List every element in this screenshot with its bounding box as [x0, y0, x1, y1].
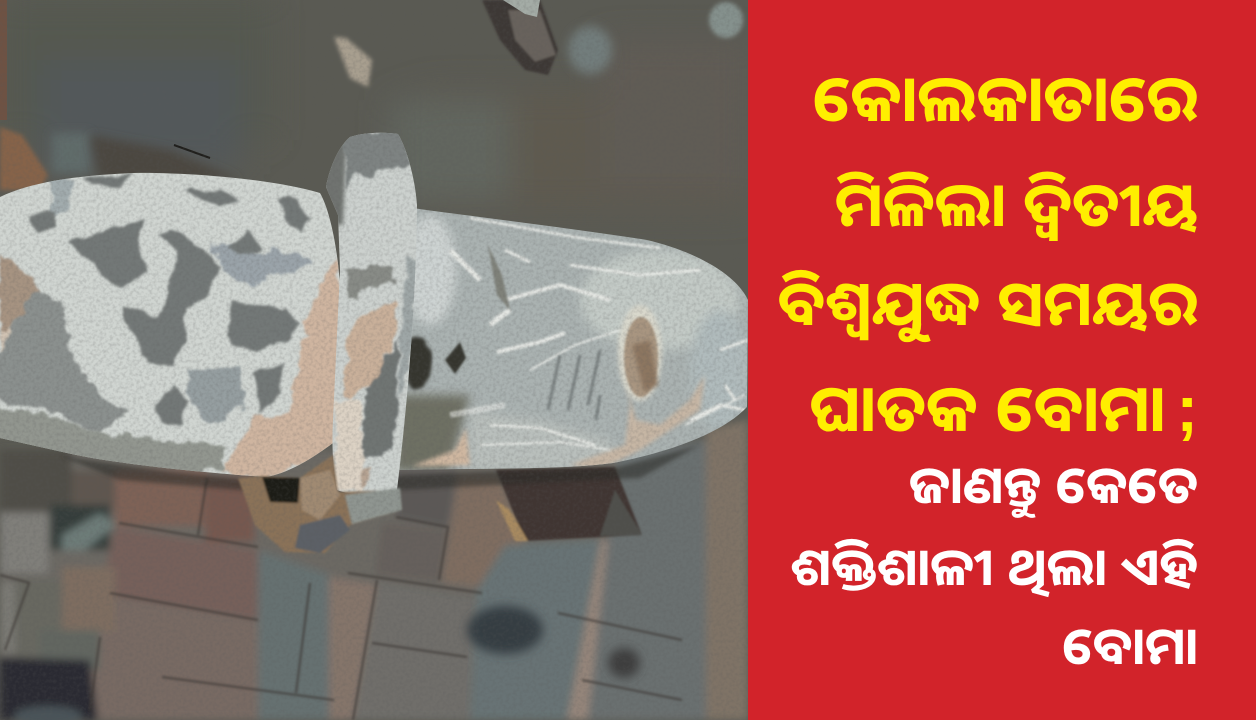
bomb rear body	[0, 165, 345, 485]
nose scratches	[450, 218, 748, 450]
rear body dark patches	[30, 174, 312, 427]
headline line 1: କୋଲକାତାରେ	[813, 63, 1198, 135]
collar band	[326, 132, 417, 493]
nose fold	[488, 245, 510, 310]
bomb nose section	[395, 200, 750, 475]
rear body grey corrosion	[0, 180, 310, 475]
nose tan bands	[412, 375, 705, 470]
photo grain	[0, 0, 748, 720]
subheading line 2: ଶକ୍ତିଶାଳୀ ଥିଲା ଏହି	[790, 539, 1198, 597]
shadow under bomb	[60, 445, 700, 495]
subheading line 1: ଜାଣନ୍ତୁ କେତେ	[909, 457, 1198, 515]
subheading line 3: ବୋମା	[1062, 618, 1198, 676]
nose dent	[618, 305, 662, 401]
panel: red headline panel	[748, 0, 1256, 720]
dark broken chunk	[496, 467, 642, 541]
rear body tan rust	[0, 253, 345, 480]
shoe	[482, 0, 558, 75]
paving joints	[0, 478, 682, 720]
headline line 3: ବିଶ୍ୱଯୁଦ୍ଧ ସମୟର	[778, 270, 1198, 339]
headline line 4: ଘାତକ ବୋମା;	[809, 372, 1198, 445]
stencil marks	[548, 350, 600, 420]
holes near collar	[403, 337, 466, 389]
headline line 2: ମିଳିଲା ଦ୍ୱିତୀୟ	[835, 171, 1198, 240]
pavement	[0, 0, 750, 720]
rubble under collar	[238, 455, 402, 553]
lower bricks	[0, 420, 748, 720]
photo: unexploded WWII bomb on brick pavement	[0, 0, 748, 720]
